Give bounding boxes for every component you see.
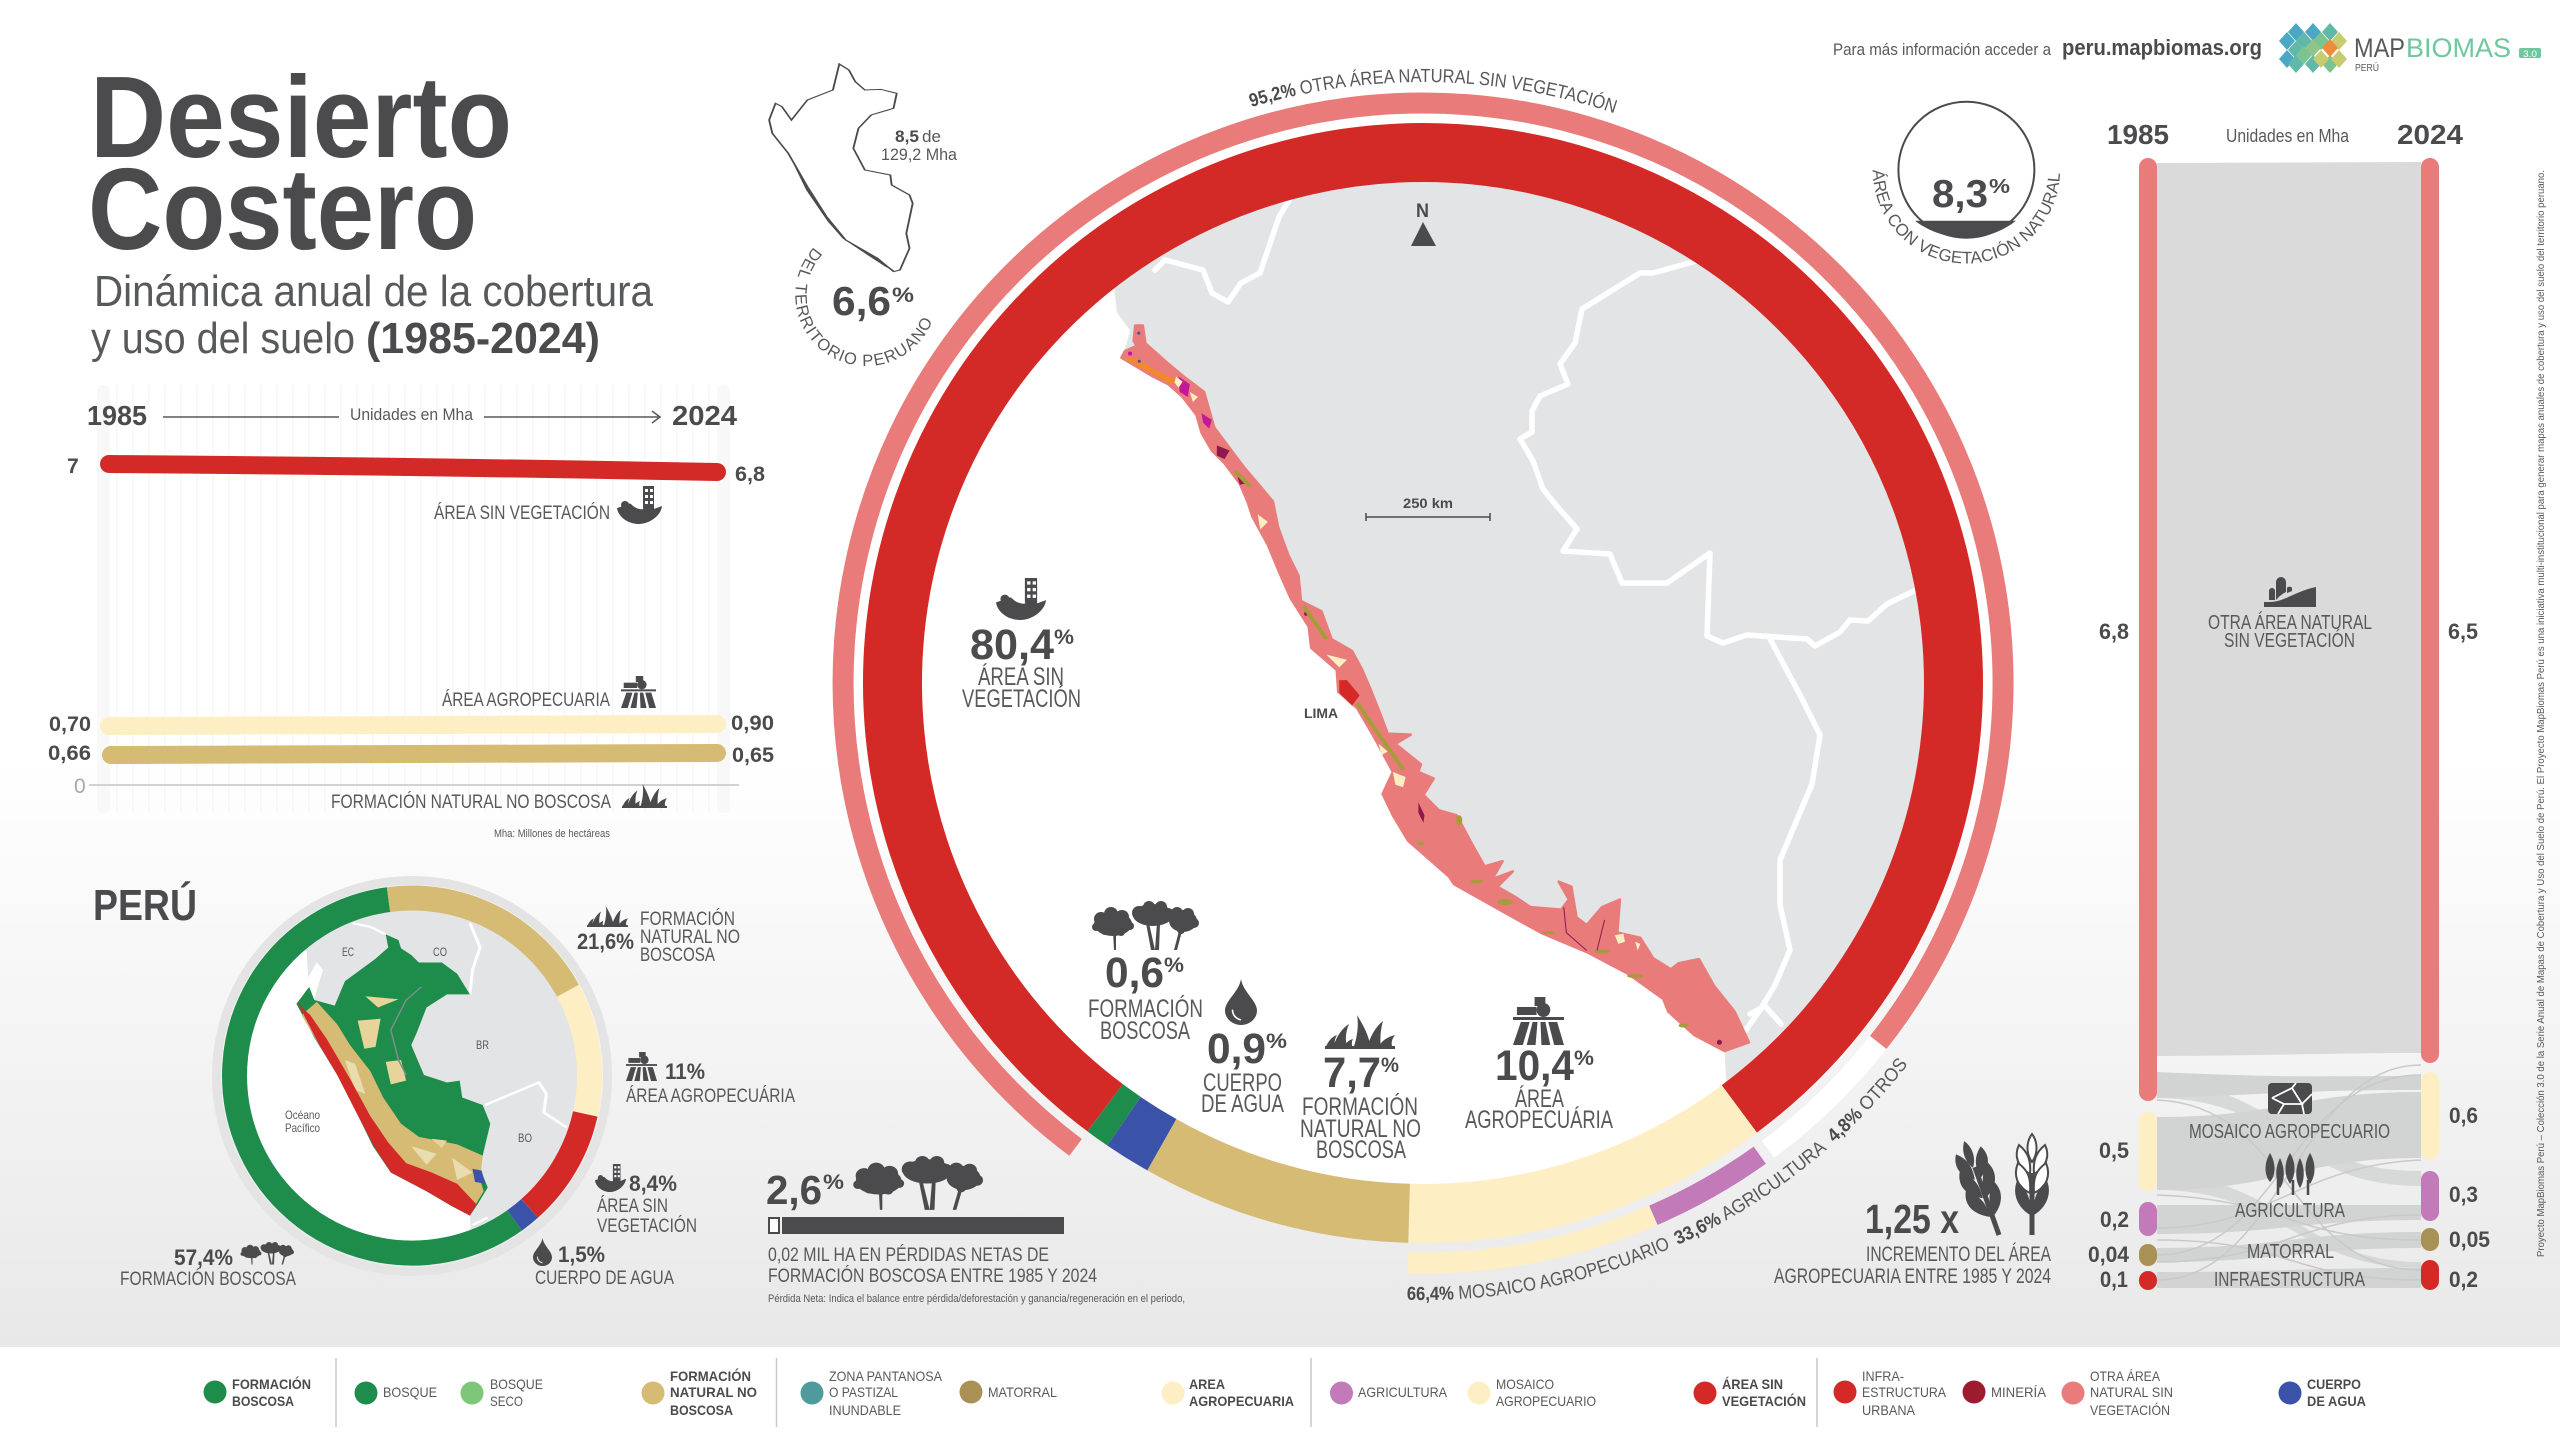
stat: Peru formacion natural no boscosa [577, 906, 740, 966]
panel: small Peru outline: 8,5 [895, 127, 919, 146]
label: infraestructura: INFRAESTRUCTURA [2214, 1269, 2366, 1291]
legend [204, 1358, 2366, 1427]
stat: agricultural increase: INCREMENTO DEL ÁREA [1866, 1243, 2051, 1266]
legend item: zona pantanosa [800, 1368, 943, 1418]
stat: Peru formacion natural no boscosa: 21,6% [577, 929, 634, 954]
stat: forest net loss: FORMACIÓN BOSCOSA ENTRE 1985 Y 2024 [768, 1265, 1097, 1287]
legend item: cuerpo de agua [2278, 1376, 2366, 1409]
ring segments [235, 898, 590, 1253]
stat: cuerpo de agua 0,9: CUERPO [1203, 1069, 1282, 1097]
stat: area agropecuaria 10,4: % [1574, 1047, 1594, 1070]
sankey values left: 0,2 [2100, 1207, 2129, 1232]
stat: Peru formacion boscosa: 57,4% [174, 1245, 233, 1270]
legend item: zona pantanosa: ZONA PANTANOSA [829, 1368, 943, 1384]
legend item: zona pantanosa: O PASTIZAL [829, 1384, 898, 1400]
curved label: agricultura: 33,6% AGRICULTURA [1674, 1142, 1828, 1244]
subtitle: Dinámica anual de la cobertura [94, 267, 653, 316]
legend item: mosaico: AGROPECUARIO [1496, 1393, 1596, 1409]
series: formacion natural no boscosa: 0,65 [732, 744, 774, 767]
map labels: Océano [285, 1108, 320, 1122]
stat: formacion natural no boscosa 7,7: BOSCOSA [1316, 1136, 1406, 1164]
stat: area con vegetacion natural: % [1989, 176, 2010, 198]
subtitle: y uso del suelo [91, 314, 355, 363]
chart header: 2024 [672, 400, 737, 431]
series: area agropecuaria: 0,70 [49, 713, 91, 736]
legend item: zona pantanosa: INUNDABLE [829, 1402, 901, 1418]
label: mosaico: MOSAICO AGROPECUARIO [2189, 1121, 2390, 1143]
stat: formacion boscosa 0,6 [1088, 901, 1203, 1045]
country borders [1155, 195, 1920, 1045]
stat: area sin vegetacion 80,4 [962, 578, 1081, 713]
note: Mha: Mha: Millones de hectáreas [494, 828, 610, 840]
desert coastal strip [1121, 326, 1749, 1051]
stat: forest net loss: 2,6 [766, 1167, 822, 1213]
legend item: bosque seco: SECO [490, 1393, 523, 1409]
legend item: mosaico: MOSAICO [1496, 1376, 1554, 1392]
logo: MapBiomas [2279, 23, 2541, 74]
chart: outer ring breakdown [843, 103, 2003, 1263]
stat: agricultural increase: AGROPECUARIA ENTRE 1985 Y 2024 [1774, 1265, 2051, 1288]
stat: Peru cuerpo de agua [533, 1238, 674, 1289]
series: area sin vegetacion: 6,8 [735, 463, 765, 486]
panel: line chart 1985-2024 [48, 385, 774, 840]
label: agricultura: AGRICULTURA [2235, 1200, 2346, 1222]
stat: formacion natural no boscosa 7,7: % [1381, 1054, 1399, 1077]
header: more information link [1833, 35, 2262, 60]
curved label: mosaico: 66,4% MOSAICO AGROPECUARIO [1408, 1238, 1668, 1303]
chart header: 1985 [87, 400, 147, 431]
subtitle [91, 267, 653, 363]
logo: MapBiomas: 3.0 [2523, 49, 2537, 60]
stat: Peru formacion natural no boscosa: NATURAL NO [640, 927, 740, 948]
stat: area con vegetacion natural: 8,3 [1932, 173, 1988, 216]
series: area sin vegetacion: 7 [67, 455, 79, 478]
legend item: infraestructura urbana: URBANA [1862, 1402, 1916, 1418]
curved label: otra area natural: 95,2% OTRA ÁREA NATURAL SIN VEGETACIÓN [1249, 68, 1618, 113]
stat: forest net loss: 0,02 MIL HA EN PÉRDIDAS NETAS DE [768, 1245, 1049, 1266]
legend item: infraestructura urbana: ESTRUCTURA [1862, 1384, 1947, 1400]
panel: main map inside ring [1010, 182, 1924, 1184]
stat: area agropecuaria 10,4: AGROPECUÁRIA [1465, 1105, 1613, 1134]
stat: formacion boscosa 0,6: BOSCOSA [1100, 1017, 1190, 1045]
logo: MapBiomas: MAP [2354, 33, 2405, 63]
label: area agropecuaria: ÁREA AGROPECUARIA [442, 690, 610, 711]
curved label: otros: 4,8% OTROS [1830, 1058, 1906, 1141]
map of Peru land cover [247, 922, 568, 1240]
legend item: mosaico [1468, 1376, 1596, 1409]
legend item: formacion boscosa [204, 1375, 311, 1409]
legend item: formacion natural no boscosa: FORMACIÓN [670, 1367, 751, 1384]
scale bar [1366, 495, 1490, 521]
stat: area agropecuaria 10,4: ÁREA [1515, 1084, 1564, 1113]
stat: area con vegetacion natural: ÁREA CON VEGETACIÓN NATURAL [1872, 170, 2060, 264]
legend item: mineria: MINERÍA [1991, 1384, 2047, 1400]
stat: area sin vegetacion 80,4: 80,4 [970, 621, 1054, 669]
stat: area agropecuaria 10,4 [1465, 997, 1613, 1134]
label: area sin vegetacion [434, 486, 662, 524]
label: area sin vegetacion: ÁREA SIN VEGETACIÓN [434, 502, 610, 524]
sankey header: Unidades en Mha [2226, 126, 2350, 146]
chart: main ring [892, 153, 1953, 1213]
icon: north arrow [1411, 201, 1436, 246]
panel: sankey 1985-2024 [2088, 119, 2490, 1292]
stat: formacion boscosa 0,6: % [1164, 954, 1184, 977]
panel: small Peru outline: 129,2 Mha [881, 145, 958, 164]
legend item: formacion natural no boscosa [642, 1367, 757, 1418]
title: Costero [88, 144, 477, 274]
icon: hill and cactus [2264, 577, 2316, 607]
stat: Peru formacion boscosa [120, 1242, 296, 1290]
label: otra area natural [2208, 611, 2372, 652]
stat: cuerpo de agua 0,9: DE AGUA [1201, 1090, 1284, 1118]
label: matorral: MATORRAL [2247, 1241, 2334, 1263]
map labels: Pacífico [285, 1121, 320, 1135]
logo: MapBiomas: PERÚ [2355, 61, 2379, 74]
chart header: Unidades en Mha [350, 405, 473, 424]
legend item: otra area natural: VEGETACIÓN [2090, 1402, 2170, 1418]
stat: cuerpo de agua 0,9 [1201, 979, 1287, 1118]
sankey values left [2088, 619, 2130, 1292]
legend item: area agropecuaria [1162, 1376, 1294, 1409]
stat: agricultural increase: 1,25 x [1865, 1196, 1959, 1242]
header: more information link: peru.mapbiomas.org [2062, 35, 2262, 60]
sankey bars left [2139, 158, 2157, 1290]
panel: small Peru outline: % [892, 284, 914, 307]
label: otra area natural: OTRA ÁREA NATURAL [2208, 611, 2372, 634]
series: formacion natural no boscosa: 0,66 [48, 742, 91, 765]
stat: formacion boscosa 0,6: FORMACIÓN [1088, 994, 1203, 1023]
curved label: del territorio peruano: DEL TERRITORIO PERUANO [795, 248, 931, 366]
label: otra area natural: SIN VEGETACIÓN [2224, 629, 2355, 652]
stat: Peru area sin vegetacion [595, 1164, 697, 1237]
legend item: agricultura [1330, 1382, 1448, 1404]
stat: agricultural increase [1774, 1134, 2051, 1288]
stat: Peru area sin vegetacion: VEGETACIÓN [597, 1215, 697, 1237]
legend item: cuerpo de agua: CUERPO [2307, 1376, 2361, 1392]
sankey values right: 0,05 [2449, 1227, 2490, 1252]
map labels: BO [518, 1131, 532, 1145]
legend item: otra area natural: OTRA ÁREA [2090, 1368, 2161, 1384]
panel: Peru donut map [212, 876, 612, 1266]
panel: small Peru outline: de [922, 127, 941, 146]
stat: formacion boscosa 0,6: 0,6 [1105, 949, 1164, 997]
icon: wheat [1948, 1134, 2049, 1241]
sankey values right [2448, 619, 2490, 1292]
stat: formacion natural no boscosa 7,7 [1300, 1015, 1421, 1164]
sankey values right: 0,6 [2449, 1103, 2478, 1128]
stat: Peru formacion boscosa: FORMACIÓN BOSCOSA [120, 1268, 296, 1290]
stat: Peru formacion natural no boscosa: BOSCOSA [640, 945, 715, 966]
legend item: mineria [1962, 1380, 2047, 1404]
legend item: formacion natural no boscosa: NATURAL NO [670, 1384, 757, 1400]
legend item: infraestructura urbana: INFRA- [1862, 1368, 1904, 1384]
sankey header: 1985 [2107, 119, 2169, 150]
sankey flows [2157, 162, 2421, 1288]
sankey header [2107, 119, 2463, 150]
legend item: agricultura: AGRICULTURA [1358, 1384, 1448, 1400]
stat: Peru area sin vegetacion: 8,4% [629, 1171, 677, 1196]
sankey values left: 0,5 [2099, 1138, 2129, 1163]
sankey values left: 6,8 [2099, 619, 2129, 644]
map labels: CO [433, 945, 447, 959]
stat: cuerpo de agua 0,9: 0,9 [1207, 1025, 1266, 1073]
legend item: cuerpo de agua: DE AGUA [2307, 1393, 2366, 1409]
legend item: area sin vegetacion: VEGETACIÓN [1722, 1392, 1806, 1409]
header: more information link: Para más información acceder a [1833, 40, 2051, 59]
legend item: matorral: MATORRAL [988, 1384, 1057, 1400]
map labels [285, 945, 532, 1145]
sankey values right: 6,5 [2448, 619, 2478, 644]
icon: mosaic [2268, 1083, 2312, 1114]
legend item: formacion natural no boscosa: BOSCOSA [670, 1402, 733, 1418]
stat: Peru cuerpo de agua: 1,5% [558, 1242, 605, 1267]
legend item: bosque [354, 1382, 437, 1404]
legend item: matorral [960, 1380, 1057, 1404]
icon: Peru outline [769, 64, 913, 272]
sankey values right: 0,3 [2449, 1182, 2478, 1207]
axis: 0 [74, 775, 86, 798]
stat: area sin vegetacion 80,4: VEGETACIÓN [962, 684, 1081, 713]
legend item: infraestructura urbana [1834, 1368, 1947, 1418]
title: Desierto [90, 52, 512, 182]
scale bar: 250 km [1403, 495, 1453, 511]
side note: Proyecto MapBiomas Perú – Colección 3.0 de la Serie Anual de Mapas de Cobertura y Uso del Suelo de Perú. El Proyecto MapBiomas Perú es una iniciativa multi-institucional para generar mapas anuales de cobertura y uso del suelo del territorio peruano. [2535, 170, 2547, 1257]
stat: Peru area agropecuaria: ÁREA AGROPECUÁRIA [626, 1086, 795, 1107]
series: area sin vegetacion [67, 455, 765, 486]
stat: Peru area sin vegetacion: ÁREA SIN [597, 1196, 668, 1217]
legend item: formacion boscosa: BOSCOSA [232, 1393, 294, 1409]
stat: formacion natural no boscosa 7,7: NATURAL NO [1300, 1115, 1421, 1143]
stat: Peru formacion natural no boscosa: FORMACIÓN [640, 908, 735, 930]
chart header [87, 400, 737, 431]
stat: Peru area agropecuaria [626, 1052, 795, 1107]
panel: small Peru outline: 6,6 [832, 278, 891, 324]
stat: forest net loss: % [823, 1171, 844, 1194]
stat: area agropecuaria 10,4: 10,4 [1495, 1042, 1574, 1090]
stat: area con vegetacion natural [1872, 100, 2060, 264]
legend item: otra area natural: NATURAL SIN [2090, 1384, 2173, 1400]
sankey bars right [2421, 158, 2439, 1290]
series: formacion natural no boscosa [48, 742, 774, 767]
label: Lima: LIMA [1304, 705, 1338, 721]
stat: formacion natural no boscosa 7,7: 7,7 [1323, 1049, 1381, 1097]
legend item: bosque seco [460, 1376, 543, 1409]
legend item: area agropecuaria: AGROPECUARIA [1189, 1393, 1294, 1409]
panel: small Peru outline [768, 62, 958, 366]
sankey header: 2024 [2397, 119, 2463, 150]
stat: formacion natural no boscosa 7,7: FORMACIÓN [1302, 1092, 1418, 1121]
stat: area sin vegetacion 80,4: ÁREA SIN [978, 662, 1064, 691]
icon: wheat small [2266, 1153, 2314, 1195]
title [88, 52, 512, 274]
sankey values left: 0,04 [2088, 1242, 2130, 1267]
icon: diamonds [2279, 23, 2347, 73]
legend item: otra area natural [2062, 1368, 2173, 1418]
series: area agropecuaria: 0,90 [731, 712, 774, 735]
legend item: bosque seco: BOSQUE [490, 1376, 543, 1392]
map labels: EC [342, 945, 354, 959]
label: area agropecuaria [442, 676, 656, 711]
map labels: BR [476, 1038, 489, 1052]
progress bar [769, 1217, 1064, 1234]
sankey values left: 0,1 [2100, 1267, 2128, 1292]
stat: Peru cuerpo de agua: CUERPO DE AGUA [535, 1268, 674, 1289]
legend item: bosque: BOSQUE [383, 1384, 437, 1400]
heading: Peru: PERÚ [93, 880, 197, 930]
subtitle: (1985-2024) [366, 314, 600, 363]
stat: Peru area agropecuaria: 11% [665, 1059, 705, 1084]
legend item: formacion boscosa: FORMACIÓN [232, 1375, 311, 1392]
legend item: area sin vegetacion [1694, 1376, 1806, 1409]
sankey values right: 0,2 [2449, 1267, 2478, 1292]
stat: forest net loss: Pérdida Neta: Indica el balance entre pérdida/deforestación y ganancia/regeneración en el periodo, [768, 1293, 1185, 1305]
logo: MapBiomas: BIOMAS [2406, 33, 2511, 63]
stat: forest net loss [766, 1156, 1185, 1305]
stat: area sin vegetacion 80,4: % [1054, 626, 1074, 649]
series: area agropecuaria [49, 712, 774, 736]
icon: north arrow: N [1416, 201, 1429, 222]
label: formacion natural no boscosa: FORMACIÓN NATURAL NO BOSCOSA [331, 791, 611, 813]
ocean [922, 288, 1726, 1184]
legend item: area agropecuaria: AREA [1189, 1376, 1225, 1392]
legend item: area sin vegetacion: ÁREA SIN [1722, 1376, 1783, 1392]
stat: cuerpo de agua 0,9: % [1266, 1030, 1287, 1053]
